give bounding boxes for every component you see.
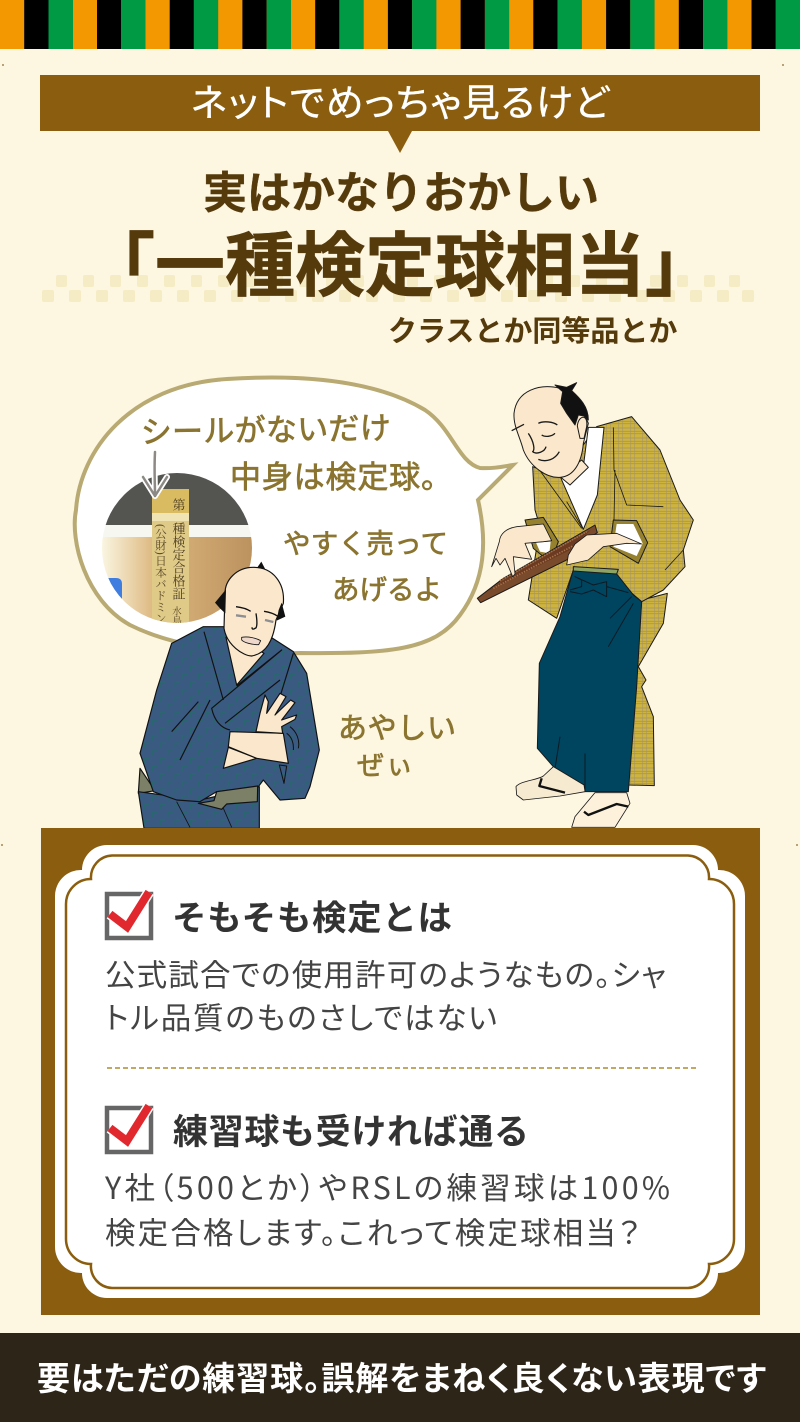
section: practice shuttles pass too <box>104 1106 670 1253</box>
obi belt <box>198 786 258 809</box>
near sleeve opening <box>610 520 648 563</box>
front foot and sandal <box>572 793 630 827</box>
customer comment: ぜぃ <box>357 744 413 783</box>
footer band <box>0 1333 800 1422</box>
white collar <box>561 427 604 529</box>
far arm and hand <box>492 524 552 577</box>
banner <box>40 72 760 153</box>
head <box>514 387 588 477</box>
arrow to seal <box>143 452 167 496</box>
back kimono hem <box>628 593 667 786</box>
hair <box>215 562 285 621</box>
hakama trousers <box>537 570 642 792</box>
man: suspicious customer with folded arms <box>138 562 319 828</box>
footer band: 要はただの練習球。誤解をまねく良くない表現です <box>37 1352 766 1400</box>
photo of certificate seal: 種検定合格証 <box>170 522 186 600</box>
kimono <box>140 627 319 802</box>
far sleeve <box>525 517 558 563</box>
banner: ネットでめっちゃ見るけど <box>191 72 611 127</box>
title line 2: 「一種検定球相当」 <box>85 227 715 305</box>
section: what is certification <box>105 892 666 1038</box>
panel card inner line <box>66 856 734 1288</box>
body text: トル品質のものさしではない <box>105 994 497 1038</box>
customer comment: あやしい <box>338 705 456 747</box>
neck <box>560 460 588 485</box>
bubble handwriting: あげるよ <box>332 567 442 607</box>
chest <box>226 637 264 685</box>
body text <box>104 1164 670 1253</box>
heading: 練習球も受ければ通る <box>173 1113 529 1152</box>
sash and knot <box>573 567 618 574</box>
bubble handwriting: やすく売って <box>283 521 448 561</box>
info panel <box>40 828 760 1315</box>
bubble handwriting: 中身は検定球。 <box>230 452 452 497</box>
body text <box>105 951 666 1038</box>
upper forearm <box>228 732 288 763</box>
lower body <box>138 787 259 828</box>
title <box>85 169 715 348</box>
abacus <box>477 525 597 603</box>
striped top border <box>0 0 800 49</box>
checker pattern behind title <box>42 275 754 302</box>
title line 1: 実はかなりおかしい <box>203 169 599 218</box>
panel card outer <box>55 845 745 1298</box>
photo of certificate seal: 水鳥 <box>170 605 182 626</box>
photo of certificate seal <box>102 473 252 623</box>
check icon <box>107 1106 151 1152</box>
heading: そもそも検定とは <box>172 900 452 938</box>
body text: 検定合格します。これって検定球相当？ <box>105 1209 640 1253</box>
man: merchant with abacus <box>477 383 693 827</box>
speech bubble <box>75 377 513 653</box>
customer comment <box>338 705 456 783</box>
hair <box>555 383 588 425</box>
jacket seams <box>538 427 683 570</box>
body text: Y社（500とか）やRSLの練習球は100% <box>104 1164 670 1208</box>
sash behind <box>138 768 155 793</box>
hand <box>256 693 297 733</box>
check icon <box>107 892 151 938</box>
haori jacket <box>528 417 693 618</box>
title note: クラスとか同等品とか <box>388 315 677 348</box>
face <box>236 607 277 629</box>
face <box>512 422 559 461</box>
bubble handwriting: シールがないだけ <box>140 403 391 452</box>
near arm and hand <box>567 533 642 565</box>
bubble handwriting <box>140 403 452 607</box>
photo of certificate seal: 第 <box>170 498 186 511</box>
photo of certificate seal: (公財)日本バドミント <box>154 524 167 635</box>
ear <box>577 417 587 438</box>
collar lines <box>172 632 293 760</box>
head <box>224 567 283 656</box>
back foot and sandal <box>516 767 585 800</box>
lower arm <box>223 747 257 768</box>
body text: 公式試合での使用許可のようなもの。シャ <box>105 951 666 995</box>
